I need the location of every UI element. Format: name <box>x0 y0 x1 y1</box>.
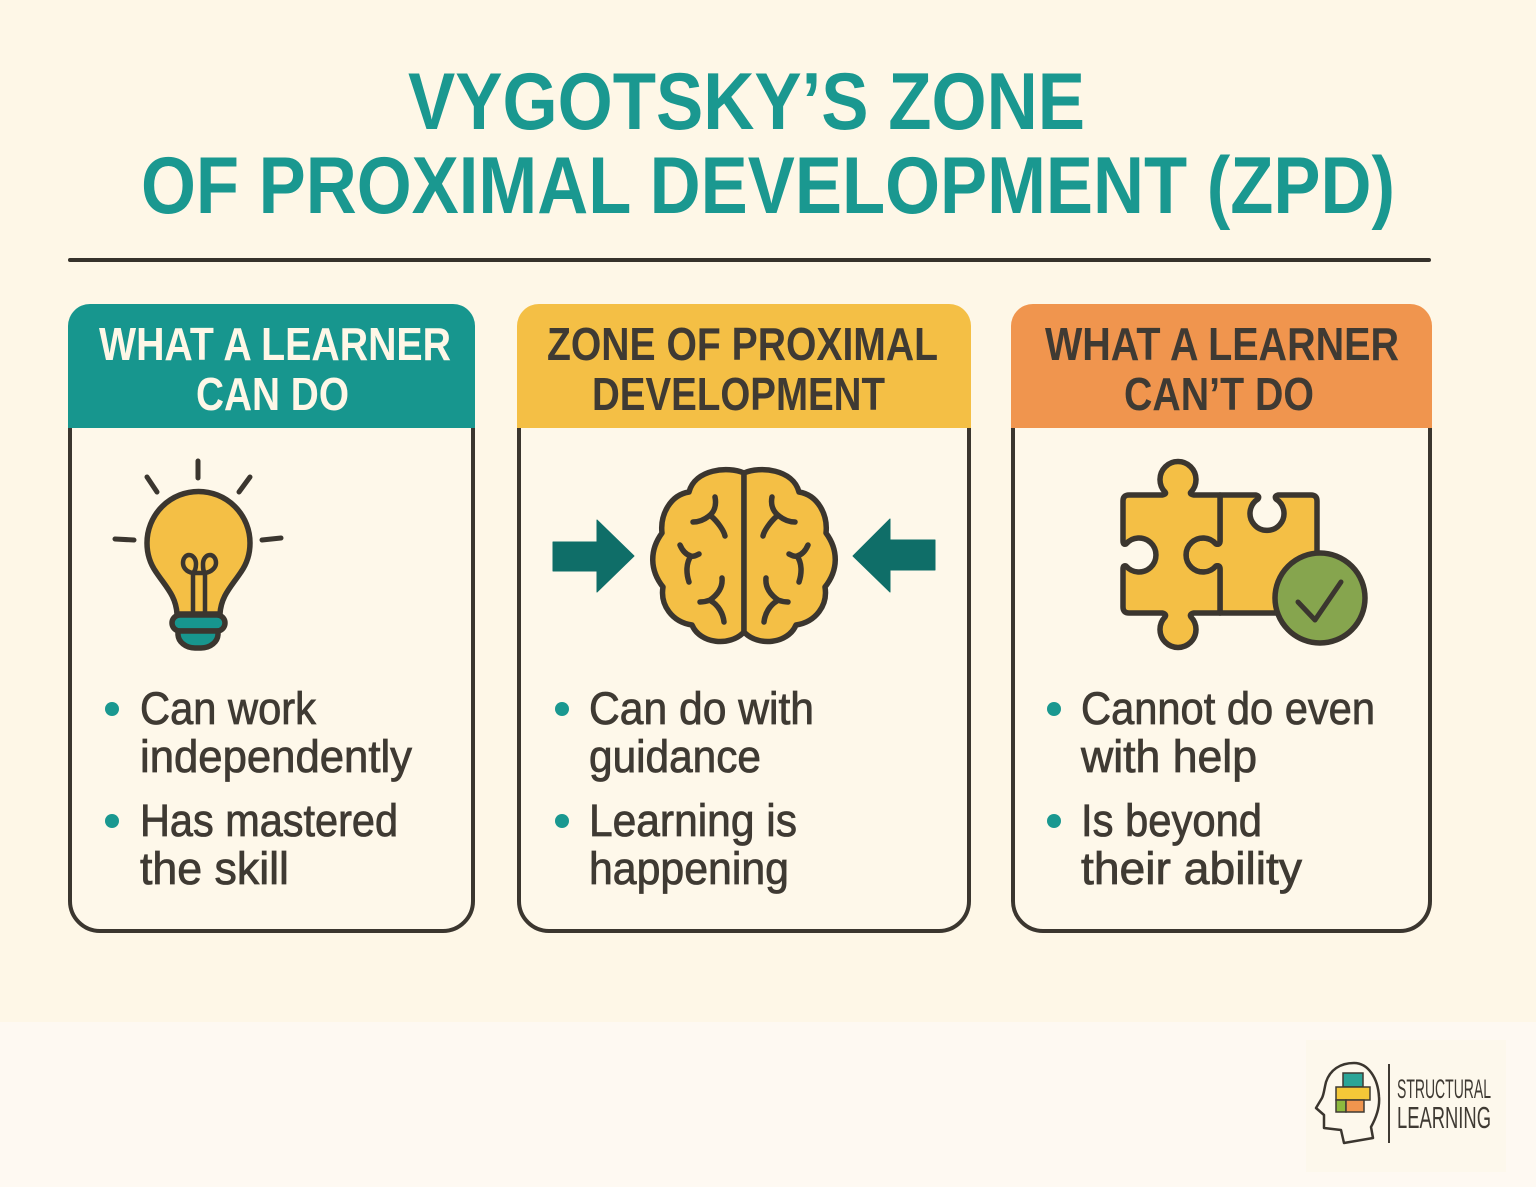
panel header: DEVELOPMENT <box>592 368 885 420</box>
panel header: ZONE OF PROXIMAL <box>547 318 938 370</box>
bullet list: independently <box>140 731 412 782</box>
bullet list: happening <box>589 843 789 894</box>
logo icon: head with blocks <box>1316 1063 1379 1143</box>
bullet list <box>1047 683 1375 894</box>
bullet list <box>105 683 412 894</box>
panel header: WHAT A LEARNER <box>1045 318 1399 370</box>
panel: what a learner can do <box>68 304 475 931</box>
logo background <box>1306 1040 1506 1172</box>
icon: light bulb <box>115 461 281 648</box>
bullet list: Cannot do even <box>1081 683 1375 734</box>
logo: Structural Learning <box>1306 1040 1506 1172</box>
panel outline <box>519 428 969 931</box>
logo wordmark <box>1397 1074 1491 1135</box>
logo divider <box>1388 1064 1390 1143</box>
bullet list: their ability <box>1081 843 1303 894</box>
bullet list: Is beyond <box>1081 795 1262 846</box>
panel: zone of proximal development <box>517 304 971 931</box>
bullet list: Can do with <box>589 683 814 734</box>
background: lower pale band <box>0 1022 1536 1187</box>
icon: left arrow <box>853 519 935 592</box>
bullet list: Can work <box>140 683 316 734</box>
icon: puzzle pieces with check mark <box>1123 462 1365 647</box>
panel header <box>517 304 971 428</box>
title: VYGOTSKY’S ZONE <box>408 57 1085 147</box>
panel header: CAN DO <box>196 368 349 420</box>
bullet list: with help <box>1080 731 1257 782</box>
panel outline <box>70 428 473 931</box>
title <box>141 57 1395 231</box>
panel header: WHAT A LEARNER <box>99 318 451 370</box>
bullet list: Has mastered <box>140 795 398 846</box>
icon: brain <box>653 470 835 642</box>
bullet list: Learning is <box>589 795 797 846</box>
bullet list: the skill <box>140 843 289 894</box>
title divider rule <box>68 258 1431 262</box>
panel: what a learner can't do <box>1011 304 1432 931</box>
bullet list <box>555 683 814 894</box>
panel header <box>68 304 475 428</box>
panel header: CAN’T DO <box>1124 368 1314 420</box>
panel outline <box>1013 428 1430 931</box>
icon: right arrow <box>553 520 634 592</box>
bullet list: guidance <box>589 731 761 782</box>
panel header <box>1011 304 1432 428</box>
